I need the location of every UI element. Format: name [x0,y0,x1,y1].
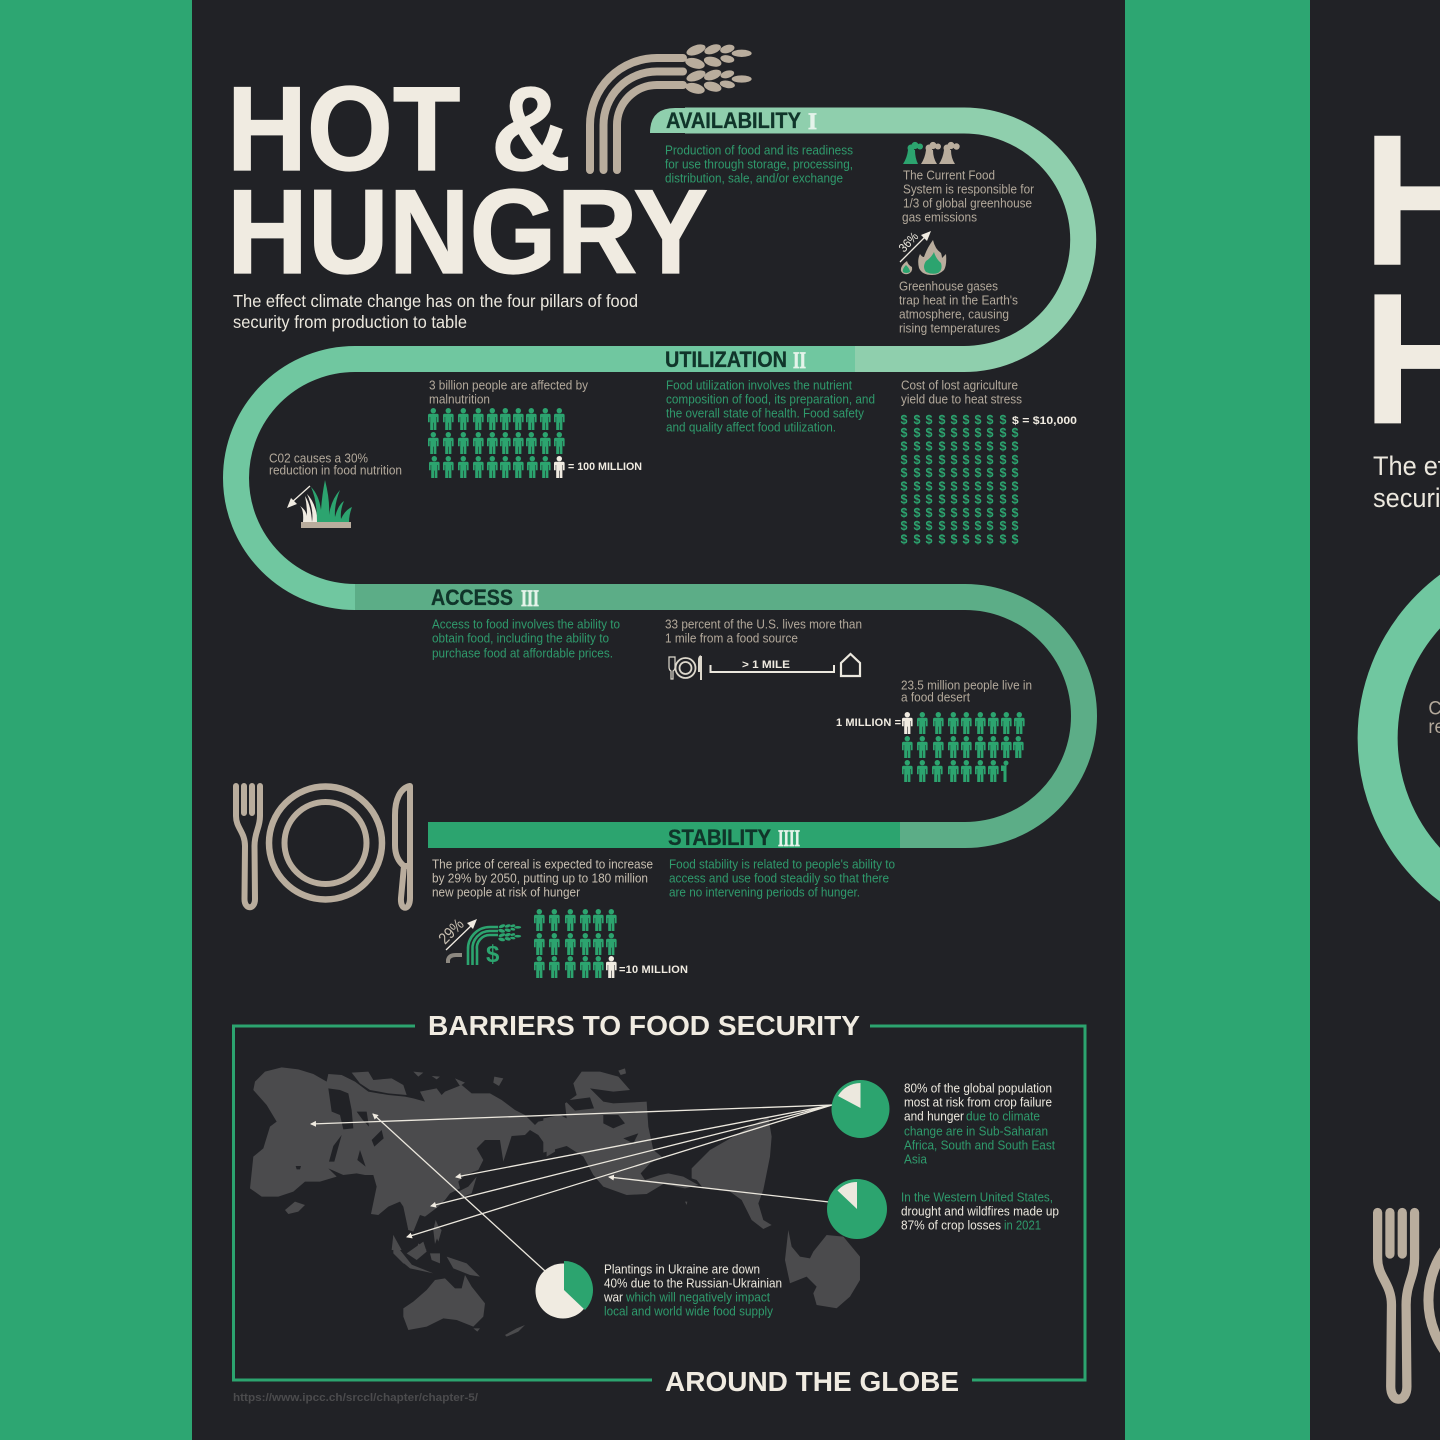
main dark panel [192,0,1125,1440]
pictogram: dollar grid: $$$$$$$$$$ [900,440,1018,454]
ribbon: winding food security path [236,108,1084,835]
panel: repeated poster crop [1364,98,1440,1399]
text: distance from food [665,618,862,646]
text: cereal price: by 29% by 2050, putting up to 180 million [432,872,648,886]
text: ukraine plantings: which will negatively impact [625,1291,770,1305]
title [227,62,708,299]
text: western united states: 87% of crop losses [901,1219,1001,1233]
legend: dollar value: $ = $10,000 [1012,415,1077,427]
pictogram: 23.5 million people [902,712,1025,782]
text: 80 percent at risk: change are in Sub-Saharan [904,1125,1048,1139]
text: 80 percent at risk: and hunger [904,1110,964,1124]
icon: house [841,654,860,676]
icon: grass with arrow [287,480,352,528]
pictogram: 3 billion people [428,408,565,478]
text: greenhouse emissions: 1/3 of global greenhouse [903,197,1032,211]
distance bracket: > 1 MILE [742,659,790,671]
heading: stability: STABILITY [668,825,771,850]
text: 80 percent at risk [904,1082,1055,1167]
text: 80 percent at risk: Africa, South and South East [904,1139,1055,1153]
text: ukraine plantings: war [603,1291,623,1305]
legend: 10 million: =10 MILLION [619,964,688,976]
ribbon segment: availability [650,108,1083,359]
pictogram: dollar grid: $$$$$$$$$$ [900,519,1018,533]
text: availability definition: for use through storage, processing, [665,158,853,172]
heading: access: III [521,586,539,611]
map [250,1067,860,1337]
text: distance from food: 1 mile from a food source [665,632,798,646]
panel: barriers to food security [234,1010,1085,1397]
text: stability definition [669,858,895,900]
text: utilization definition: and quality affect food utilization. [666,421,836,435]
pictogram: dollar grid [900,413,1018,546]
text: availability definition: distribution, sale, and/or exchange [665,172,843,186]
text: distance from food: 33 percent of the U.S. lives more than [665,618,862,632]
text: western united states: In the Western United States, [901,1191,1053,1205]
icon: rising wheat price: $ [486,941,500,968]
text: CO2 nutrition [269,452,402,478]
text: 80 percent at risk: most at risk from crop failure [904,1096,1052,1110]
icon: smokestacks [903,142,960,164]
text: food desert: 23.5 million people live in [901,679,1032,693]
pictogram: dollar grid: $$$$$$$$$$ [900,466,1018,480]
pictogram: dollar grid: $$$$$$$$$$ [900,506,1018,520]
heading: utilization: UTILIZATION [665,347,787,372]
pictogram: 180 million people [534,909,617,978]
heading: utilization: II [793,348,806,373]
text: access definition: obtain food, including the ability to [432,632,609,646]
heading: availability: AVAILABILITY [666,108,801,133]
icon: wheat [590,42,752,170]
text: 80 percent at risk: due to climate [966,1110,1040,1124]
text: greenhouse emissions [902,169,1034,225]
text: greenhouse emissions: System is responsible for [903,183,1034,197]
text: cereal price [432,858,653,900]
text: ukraine plantings: Plantings in Ukraine are down [604,1263,760,1277]
text: greenhouse emissions: The Current Food [903,169,995,183]
distance bracket [710,659,834,672]
text: lost agriculture: yield due to heat stress [901,393,1022,407]
ribbon segment: access [355,597,1084,835]
heading: availability: I [808,109,817,134]
heading: around the globe: AROUND THE GLOBE [665,1366,959,1397]
heading: access: ACCESS [431,585,513,610]
text: western united states: drought and wildfires made up [901,1205,1059,1219]
icon: flames with arrow: 36% [896,229,921,255]
text: 80 percent at risk: Asia [904,1153,927,1167]
icon: rising wheat price: 29% [436,916,468,948]
panel: access [431,585,1032,782]
panel: availability [665,108,1034,336]
text: cereal price: new people at risk of hunger [432,886,580,900]
subtitle: security from production to table [233,312,467,332]
text: food desert [901,679,1032,705]
text: greenhouse gases: Greenhouse gases [899,280,998,294]
pictogram: dollar grid: $$$$$$$$$$ [900,453,1018,467]
text: access definition [432,618,620,661]
pie: 80 percent [832,1080,890,1138]
pictogram: dollar grid: $$$$$$$$$$ [900,426,1018,440]
text: 80 percent at risk: 80% of the global population [904,1082,1052,1096]
text: ukraine plantings [603,1263,782,1319]
text: cereal price: The price of cereal is expected to increase [432,858,653,872]
text: access definition: purchase food at affordable prices. [432,647,613,661]
title: HUNGRY [227,165,708,299]
text: food desert: a food desert [901,691,970,705]
pictogram: dollar grid: $$$$$$$$$ [900,413,1006,427]
text: stability definition: Food stability is related to people's ability to [669,858,895,872]
text: western united states: in 2021 [1004,1219,1041,1233]
legend: 100 million: = 100 MILLION [568,461,642,473]
text: ukraine plantings: 40% due to the Russian-Ukrainian [604,1277,782,1291]
text: ukraine plantings: local and world wide food supply [604,1305,774,1319]
text: malnutrition [429,379,589,407]
text: availability definition: Production of food and its readiness [665,144,853,158]
icon: small plate [669,656,701,680]
text: availability definition [665,144,853,186]
second dark panel cropped [1310,0,1440,1440]
ribbon segment: stability [428,822,900,848]
heading: barriers: BARRIERS TO FOOD SECURITY [428,1010,860,1041]
frame [234,1026,1085,1380]
subtitle: The effect climate change has on the four pillars of food [233,291,638,311]
panel: utilization [269,347,1077,546]
text: lost agriculture: Cost of lost agriculture [901,379,1018,393]
text: utilization definition: composition of food, its preparation, and [666,393,875,407]
pictogram: dollar grid: $$$$$$$$$$ [900,480,1018,494]
text: utilization definition [666,379,875,435]
text: lost agriculture [901,379,1022,407]
text: stability definition: are no intervening periods of hunger. [669,886,860,900]
text: CO2 nutrition: C02 causes a 30% [269,452,368,466]
legend: 1 million: 1 MILLION = [836,717,901,729]
panel: stability [432,825,895,978]
text: malnutrition: 3 billion people are affected by [429,379,589,393]
text: utilization definition: Food utilization involves the nutrient [666,379,852,393]
text: greenhouse gases: atmosphere, causing [899,308,1009,322]
text: greenhouse gases [899,280,1018,336]
pictogram: dollar grid: $$$$$$$$$$ [900,492,1018,506]
text: CO2 nutrition: reduction in food nutrition [269,464,402,478]
pictogram: dollar grid: $$$$$$$$$$ [900,532,1018,546]
text: malnutrition: malnutrition [429,393,490,407]
icon: rising wheat price [436,916,521,968]
arrows [311,1105,832,1271]
heading: stability: IIII [778,826,800,851]
text: greenhouse gases: trap heat in the Earth's [899,294,1018,308]
source url: https://www.ipcc.ch/srccl/chapter/chapter-5/ [233,1392,478,1404]
text: greenhouse gases: rising temperatures [899,322,1000,336]
icon: fork plate knife [236,786,410,908]
subtitle [233,291,638,332]
text: access definition: Access to food involves the ability to [432,618,620,632]
text: western united states [901,1191,1059,1233]
text: stability definition: access and use food steadily so that there [669,872,889,886]
title: HOT & [227,62,571,196]
pie: 40 percent [536,1261,593,1318]
pie: 87 percent [827,1179,887,1239]
icon: flames with arrow [896,229,946,275]
text: utilization definition: the overall state of health. Food safety [666,407,865,421]
ribbon segment: utilization [236,359,855,597]
text: greenhouse emissions: gas emissions [902,211,977,225]
